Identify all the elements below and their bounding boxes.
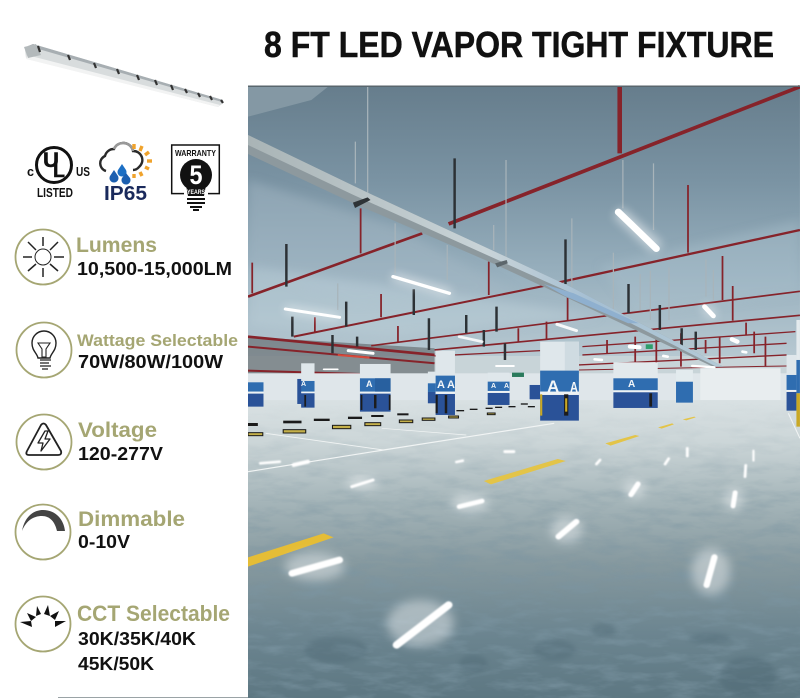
spec: lumens: 10,500-15,000LM xyxy=(77,259,232,279)
icon: sun xyxy=(16,230,70,284)
spec: lumens: Lumens xyxy=(76,234,157,257)
icon: IP65 rating: IP65 xyxy=(104,183,147,205)
icon: UL listed certification: US xyxy=(76,164,90,179)
icon: UL listed certification: LISTED xyxy=(37,186,73,200)
icon: light bulb xyxy=(16,322,72,378)
column lettering: A xyxy=(437,379,445,391)
red sprinkler pipes xyxy=(248,86,800,374)
reflection glows xyxy=(285,475,744,647)
icon: UL listed certification xyxy=(27,148,90,200)
spec: CCT selectable: CCT Selectable xyxy=(77,601,230,626)
floor markings and reflections xyxy=(248,403,800,697)
spec: dimmable xyxy=(16,504,185,560)
bottom rule xyxy=(58,697,248,698)
wheel stops xyxy=(248,403,535,436)
icon: lightning triangle xyxy=(16,414,72,470)
column lettering: A xyxy=(301,381,306,388)
yellow lane stripes xyxy=(248,417,696,567)
spec: CCT selectable: 45K/50K xyxy=(78,654,154,674)
dark tire marks xyxy=(304,623,776,697)
product image: LED vapor tight fixture xyxy=(24,44,223,107)
icon: 5 year warranty: 5 xyxy=(190,160,202,190)
column lettering: A xyxy=(504,383,509,390)
icon: 5 year warranty xyxy=(172,145,219,210)
concrete columns with blue parking bands xyxy=(248,320,800,427)
column lettering: A xyxy=(491,383,496,390)
icon: IP65 rating xyxy=(100,143,152,205)
spec: wattage selectable xyxy=(16,322,238,378)
column lettering xyxy=(301,380,635,392)
icon: 5 year warranty: YEARS xyxy=(187,189,206,196)
fixture glows xyxy=(285,212,714,317)
spec: voltage xyxy=(16,414,163,470)
spec: CCT selectable xyxy=(16,596,230,674)
icon: UL listed certification: c xyxy=(27,164,34,179)
spec: voltage: Voltage xyxy=(78,418,157,442)
icon: UL listed certification: U xyxy=(43,149,59,172)
photo top edge xyxy=(248,86,800,87)
spec: lumens xyxy=(16,230,232,284)
spec: dimmable: Dimmable xyxy=(78,508,185,531)
spec: dimmable: 0-10V xyxy=(78,532,130,552)
bright reflections xyxy=(260,448,753,645)
icon: half sun rays xyxy=(16,596,70,652)
hazard stripes xyxy=(304,393,652,413)
photo: parking garage interior xyxy=(248,86,800,698)
spec: voltage: 120-277V xyxy=(78,444,163,464)
spec: wattage selectable: Wattage Selectable xyxy=(77,331,238,350)
spec: wattage selectable: 70W/80W/100W xyxy=(78,352,223,372)
icon: dimming arc xyxy=(16,504,70,560)
icon: UL listed certification: L xyxy=(53,160,65,182)
light fixtures xyxy=(285,212,746,369)
overhead galvanized duct xyxy=(248,135,723,367)
icon: 5 year warranty: WARRANTY xyxy=(175,148,216,158)
column group far xyxy=(248,351,796,415)
floor xyxy=(248,400,800,698)
column lettering: A xyxy=(547,377,559,396)
column lettering: A xyxy=(447,379,455,391)
ceiling with pipes, duct and lights xyxy=(248,86,800,404)
column lettering: A xyxy=(570,379,578,396)
column lettering: A xyxy=(366,379,373,389)
spec: CCT selectable: 30K/35K/40K xyxy=(78,629,196,649)
back wall xyxy=(248,373,786,400)
black and grey hangers xyxy=(286,158,696,360)
column near xyxy=(540,342,579,421)
parking lines xyxy=(248,413,800,472)
column lettering: A xyxy=(628,379,635,390)
